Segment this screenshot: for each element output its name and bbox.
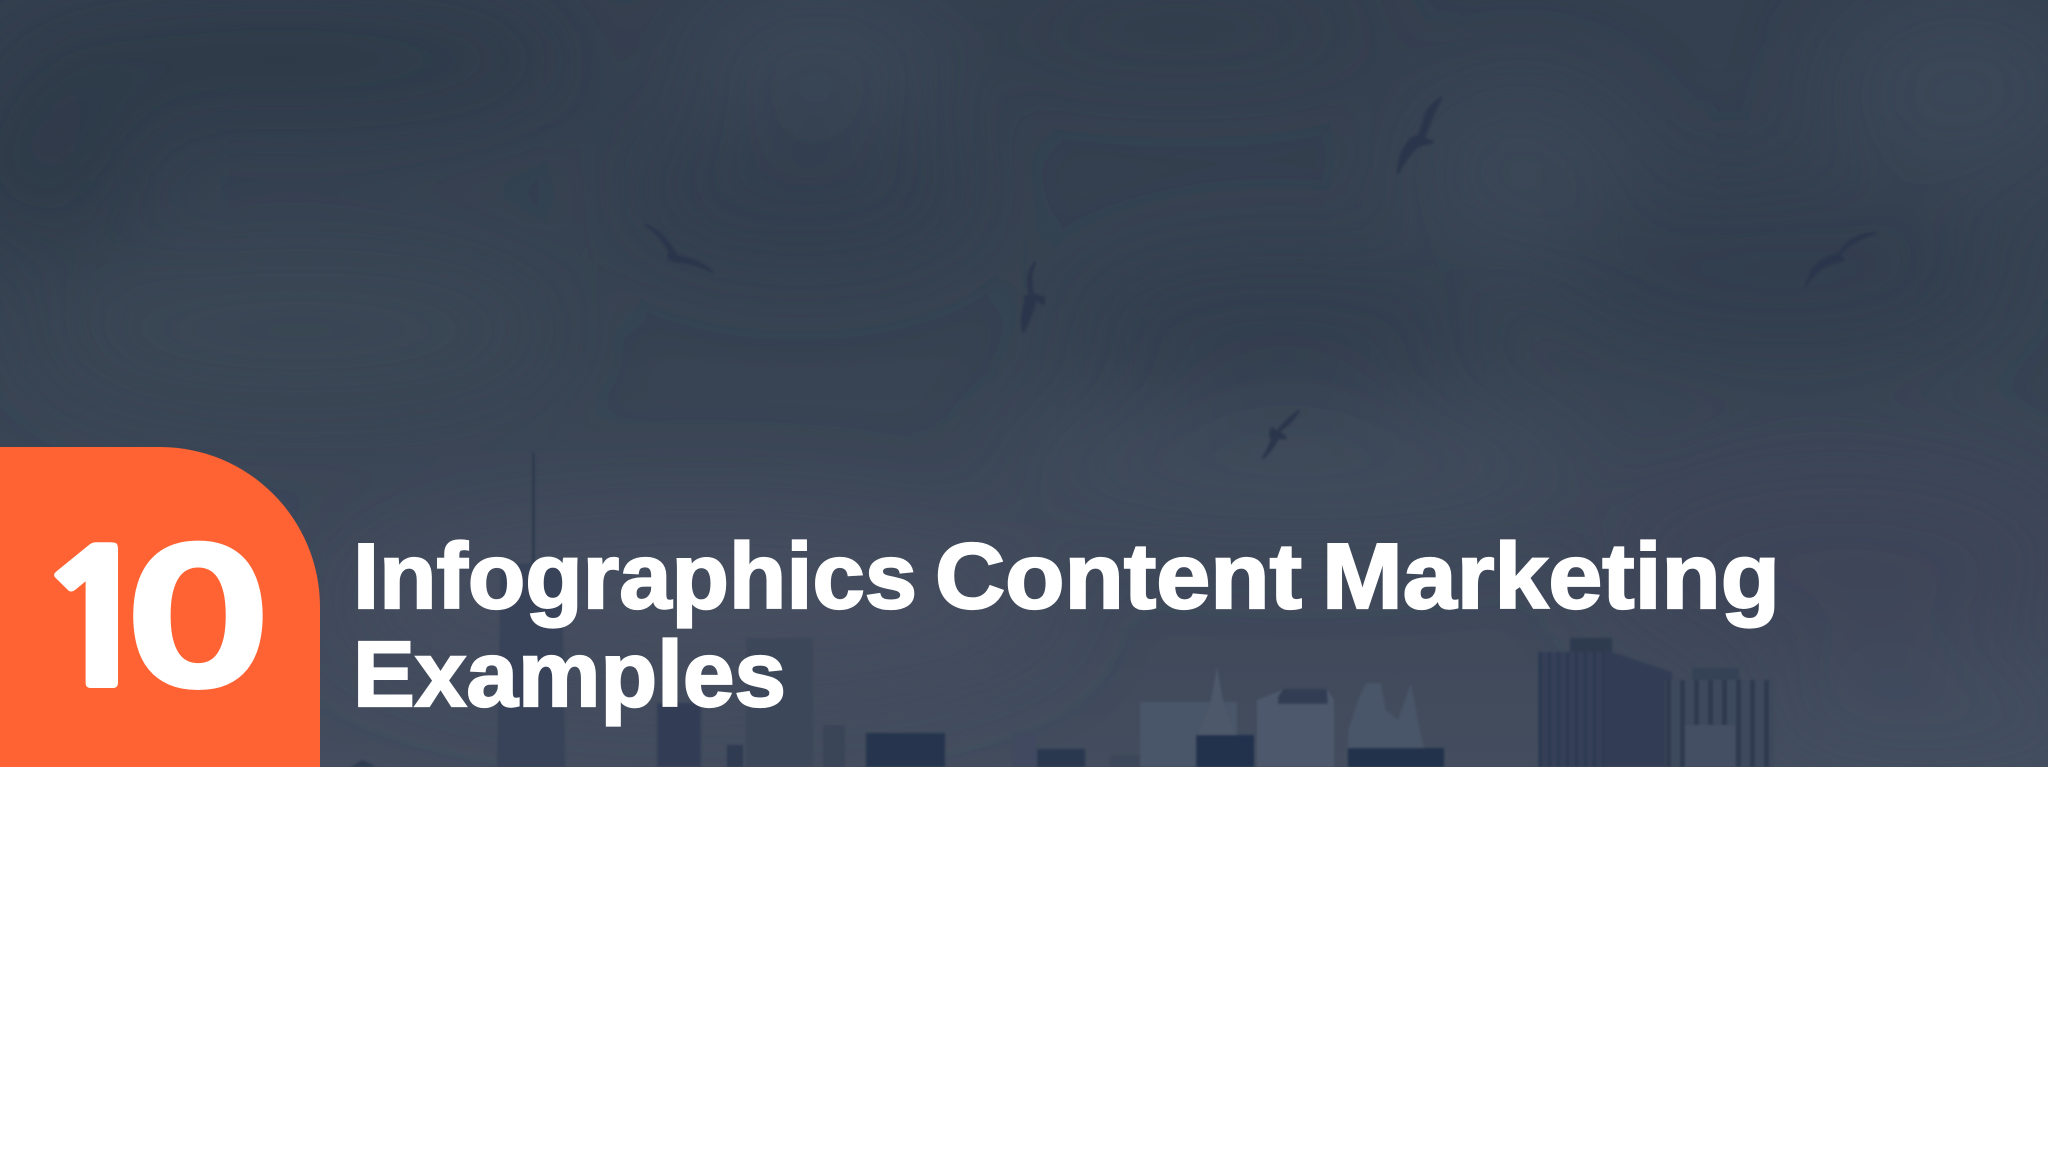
number 10: 1 xyxy=(34,529,162,713)
title: Marketing xyxy=(1322,524,1780,628)
bird 2 xyxy=(1022,262,1044,332)
title: Examples xyxy=(353,622,786,726)
title: Infographics xyxy=(353,524,917,628)
tower with spire xyxy=(497,453,565,767)
cloud shading xyxy=(0,116,113,186)
number 10: 0 xyxy=(121,529,269,713)
bird 3 xyxy=(1263,411,1299,458)
large buildings right xyxy=(1570,638,1612,656)
orange number panel xyxy=(0,447,320,767)
bird 5 xyxy=(1806,233,1876,285)
bird 1 xyxy=(646,225,713,272)
skyline xyxy=(350,453,1774,767)
downtown buildings left xyxy=(657,703,701,767)
title: Content xyxy=(935,524,1302,628)
birds xyxy=(646,98,1876,458)
midtown buildings xyxy=(1013,733,1037,767)
title xyxy=(353,524,1780,726)
bird 4 xyxy=(1398,98,1441,173)
background photo: stormy sky over city skyline xyxy=(0,0,2048,780)
